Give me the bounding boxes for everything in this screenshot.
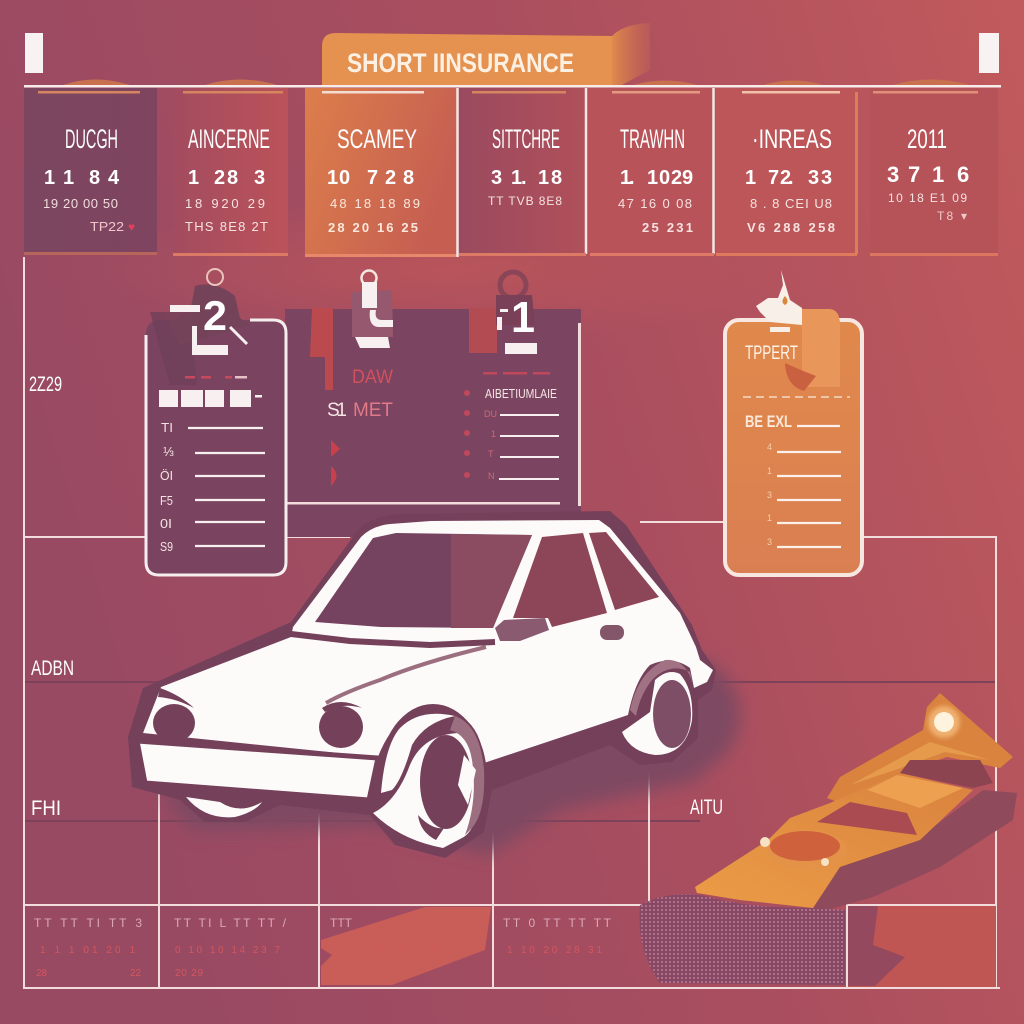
card: DUCGH: 19 20 00 50 (43, 196, 118, 211)
side windows (513, 533, 607, 627)
bottom tables: TTT (330, 916, 353, 930)
card: SITTCHRE (458, 88, 586, 257)
bottom tables: 20 29 (175, 968, 203, 979)
orange clipboard (725, 270, 862, 575)
panel text: DAW (352, 367, 393, 388)
bumper (137, 741, 378, 800)
card: TRAWHN: 1.1029 (620, 167, 693, 189)
hood crease (326, 647, 486, 703)
car shadow (160, 655, 740, 855)
orange clipboard: 3 (767, 537, 772, 547)
card: DUCGH (24, 88, 157, 255)
card: SITTCHRE: TT TVB 8E8 (488, 194, 562, 208)
card: AINCERNE: 1283 (188, 167, 265, 189)
title banner (322, 23, 650, 86)
card: 2011: 2011 (907, 124, 947, 154)
windshield (315, 533, 532, 628)
side labels: 2Z29 (29, 373, 62, 396)
middle dark panel: AIBETIUMLAIE (485, 386, 557, 401)
card clip domes (63, 80, 970, 85)
left clipboard: S9 (160, 539, 173, 554)
left clipboard: TI (161, 420, 173, 435)
orange clipboard: 3 (767, 490, 772, 500)
bottom tables (34, 916, 612, 979)
bottom tables: 22 (130, 968, 142, 979)
card: 2011: 10 18 E1 09 (888, 191, 967, 205)
card: SITTCHRE: 31.18 (491, 167, 562, 189)
side labels: AITU (690, 796, 723, 819)
card: SCAMEY: 10728 (327, 167, 414, 189)
card: SITTCHRE: SITTCHRE (492, 124, 560, 154)
card: 2011 (870, 88, 998, 256)
orange clipboard: 4 (767, 442, 772, 452)
top rail (24, 85, 1001, 88)
card: 2011: 3716 (887, 162, 969, 187)
grid lines (24, 257, 1000, 988)
card: AINCERNE: AINCERNE (188, 124, 270, 154)
card: TRAWHN: 25 231 (642, 220, 693, 235)
orange clipboard: 1 (767, 513, 772, 523)
middle dark panel: DU (484, 409, 497, 419)
card: SCAMEY: SCAMEY (337, 124, 417, 154)
card: AINCERNE (173, 88, 288, 256)
orange clipboard: 1 (767, 466, 772, 476)
card: TRAWHN: TRAWHN (620, 124, 685, 154)
hood cowl line (291, 634, 495, 645)
orange clipboard: BE EXL (745, 412, 792, 431)
dotted smudge (639, 894, 845, 985)
left clipboard: ÖI (160, 468, 173, 483)
middle dark panel: T (488, 449, 494, 459)
middle dark panel (285, 308, 581, 537)
front right wheel (373, 704, 487, 852)
card: INREAS (716, 88, 858, 256)
bottom tables: TT TT TI TT 3 (34, 916, 142, 930)
door handle (600, 625, 624, 640)
right panel clip: 1 (511, 293, 535, 342)
underside shadow (813, 790, 1017, 910)
card: SCAMEY: 28 20 16 25 (328, 220, 418, 235)
corner tabs (25, 33, 999, 73)
bottom tables: 0 10 10 14 23 7 (175, 945, 280, 956)
front left wheel (186, 797, 262, 817)
car body (143, 520, 713, 763)
car outline (128, 511, 716, 858)
card: INREAS: ·INREAS (752, 124, 832, 154)
side labels (29, 373, 723, 820)
mirror (495, 618, 549, 641)
card: DUCGH: DUCGH (65, 124, 118, 154)
lower right red block (848, 906, 996, 987)
bottom tables: 1 10 20 28 31 (507, 945, 602, 956)
car (128, 511, 716, 858)
card: INREAS: 8 . 8 CEI U8 (750, 196, 832, 211)
hood oval (767, 830, 847, 870)
card: SCAMEY (305, 88, 457, 257)
middle dark panel: MET (353, 400, 393, 421)
middle dark panel: S1 (327, 400, 347, 421)
title banner: SHORT IINSURANCE (347, 48, 574, 78)
red ribbon (321, 907, 491, 985)
left clipboard: 0I (160, 516, 172, 531)
center clip (352, 270, 393, 348)
month cards row (24, 88, 998, 257)
clip: 2 (203, 292, 227, 339)
card: AINCERNE: 18 920 29 (185, 196, 265, 211)
rear dark window (900, 760, 993, 788)
bottom tables: 1 1 1 01 20 1 (40, 945, 135, 956)
card: DUCGH: TP22 (90, 219, 124, 234)
orange clipboard: TPPERT (745, 343, 798, 364)
upper wedge (827, 693, 1013, 802)
bottom tables: 1 1 10 (378, 945, 438, 956)
card: INREAS: V6 288 258 (747, 220, 835, 235)
bottom tables: TT 0 TT TT TT (503, 916, 612, 930)
left clipboard: F5 (160, 493, 173, 508)
card: AINCERNE: THS 8E8 2T (185, 219, 268, 234)
body (695, 773, 973, 908)
clip (150, 269, 250, 385)
ribbon markers (310, 308, 333, 390)
card: 2011: T8 ▾ (937, 209, 967, 223)
left clipboard (146, 269, 286, 575)
headlights (153, 688, 363, 748)
bottom tables: 28 (36, 968, 48, 979)
card: DUCGH: 1184 (44, 167, 120, 189)
bottom tables: TT TI L TT TT / (174, 916, 287, 930)
windscreen (817, 802, 917, 835)
card: SCAMEY: 48 18 18 89 (330, 196, 420, 211)
middle dark panel: 1 (491, 429, 496, 439)
rear wheel (622, 660, 694, 755)
left clipboard: ⅓ (163, 444, 174, 459)
card: DUCGH: ♥ (128, 220, 135, 234)
card: INREAS: 172.33 (745, 167, 832, 189)
orange boat car (695, 693, 1017, 910)
card: TRAWHN (588, 88, 714, 256)
side labels: ADBN (31, 657, 74, 680)
card: TRAWHN: 47 16 0 08 (618, 196, 692, 211)
right panel clip (496, 272, 537, 354)
middle dark panel: N (488, 471, 494, 481)
clip ornament (756, 270, 802, 332)
side labels: FHI (31, 797, 61, 820)
